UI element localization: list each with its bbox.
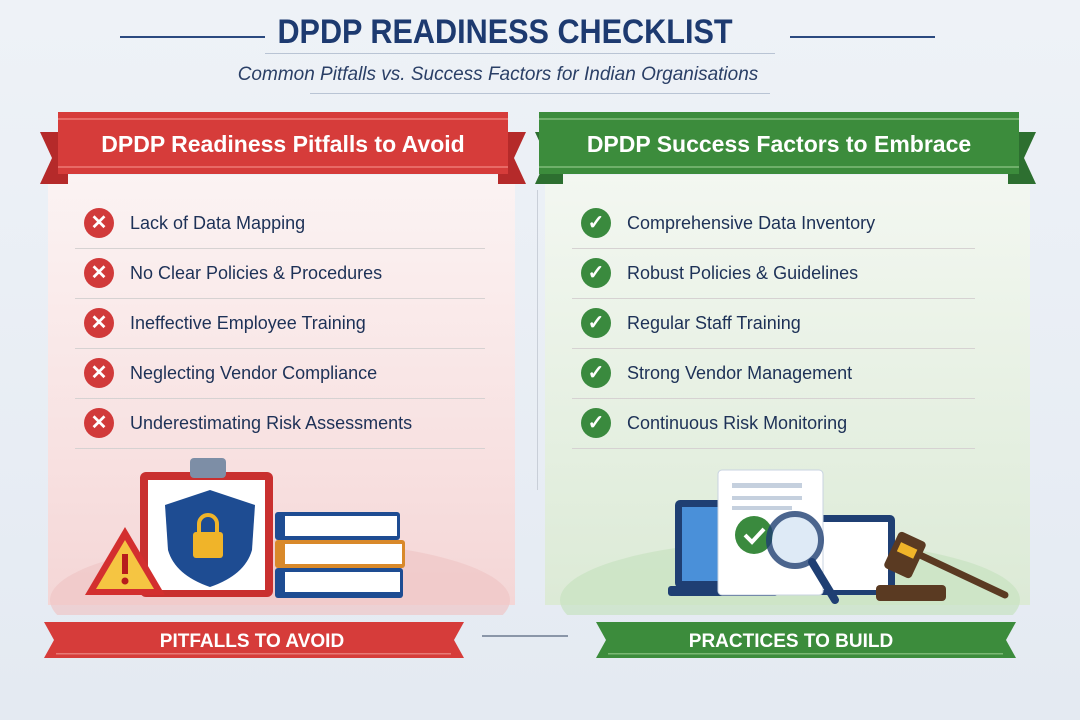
bottom banner: pitfalls (44, 622, 464, 658)
success list: Strong Vendor Management (627, 363, 852, 383)
pitfall list: ✕ (91, 312, 107, 334)
success list: ✓ (588, 262, 604, 284)
illustration: pitfalls (clipboard, shield, warning, books) (50, 458, 510, 615)
pitfall list: Underestimating Risk Assessments (130, 413, 412, 433)
success list: Regular Staff Training (627, 313, 801, 333)
illustration: success (laptop, document, magnifier, gavel) (560, 470, 1020, 615)
bottom banner: practices (596, 622, 1016, 658)
pitfall list: Neglecting Vendor Compliance (130, 363, 377, 383)
pitfall list: ✕ (91, 212, 107, 234)
success list: ✓ (588, 362, 604, 384)
success list: ✓ (588, 412, 604, 434)
panel: success (545, 175, 1030, 605)
panel: pitfalls (48, 175, 515, 605)
pitfall list: ✕ (91, 362, 107, 384)
pitfall list: No Clear Policies & Procedures (130, 263, 382, 283)
banner: success heading: DPDP Success Factors to Embrace (587, 131, 971, 157)
pitfall list: ✕ (91, 412, 107, 434)
title: DPDP READINESS CHECKLIST (277, 13, 733, 51)
pitfall list: ✕ (91, 262, 107, 284)
divider vertical (537, 190, 538, 490)
bottom banner: practices: PRACTICES TO BUILD (689, 631, 893, 652)
banner: pitfalls heading: DPDP Readiness Pitfalls to Avoid (101, 131, 465, 157)
success list: Comprehensive Data Inventory (627, 213, 875, 233)
pitfall list: Ineffective Employee Training (130, 313, 366, 333)
bottom banner: pitfalls: PITFALLS TO AVOID (160, 631, 344, 652)
success list (572, 208, 975, 449)
success list: ✓ (588, 212, 604, 234)
subtitle: Common Pitfalls vs. Success Factors for Indian Organisations (238, 64, 758, 85)
pitfall list: Lack of Data Mapping (130, 213, 305, 233)
banner: pitfalls heading (40, 112, 526, 184)
success list: Robust Policies & Guidelines (627, 263, 858, 283)
success list: Continuous Risk Monitoring (627, 413, 847, 433)
divider between bottom ribbons (482, 635, 568, 637)
pitfall list (75, 208, 485, 449)
success list: ✓ (588, 312, 604, 334)
banner: success heading (535, 112, 1036, 184)
